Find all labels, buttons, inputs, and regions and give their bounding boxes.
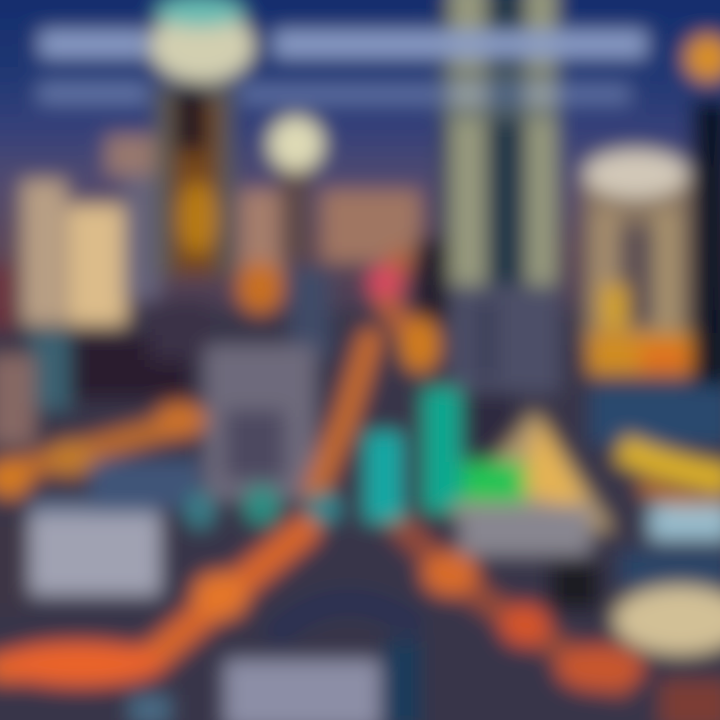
bottom centre building [130, 560, 600, 720]
right dome building [584, 35, 720, 390]
orange roads [0, 260, 620, 685]
lower city base [0, 310, 720, 720]
small dome tower [237, 117, 330, 358]
mid-left dark and grey buildings [0, 300, 315, 610]
landmark tower left [150, 0, 254, 275]
twin towers [415, 0, 560, 450]
road highlights [0, 265, 644, 691]
title text bars [38, 31, 646, 103]
far skyline buildings [0, 135, 420, 330]
green and yellow pyramid building [450, 410, 615, 555]
teal accents [185, 388, 461, 529]
right colourful building [590, 385, 720, 720]
